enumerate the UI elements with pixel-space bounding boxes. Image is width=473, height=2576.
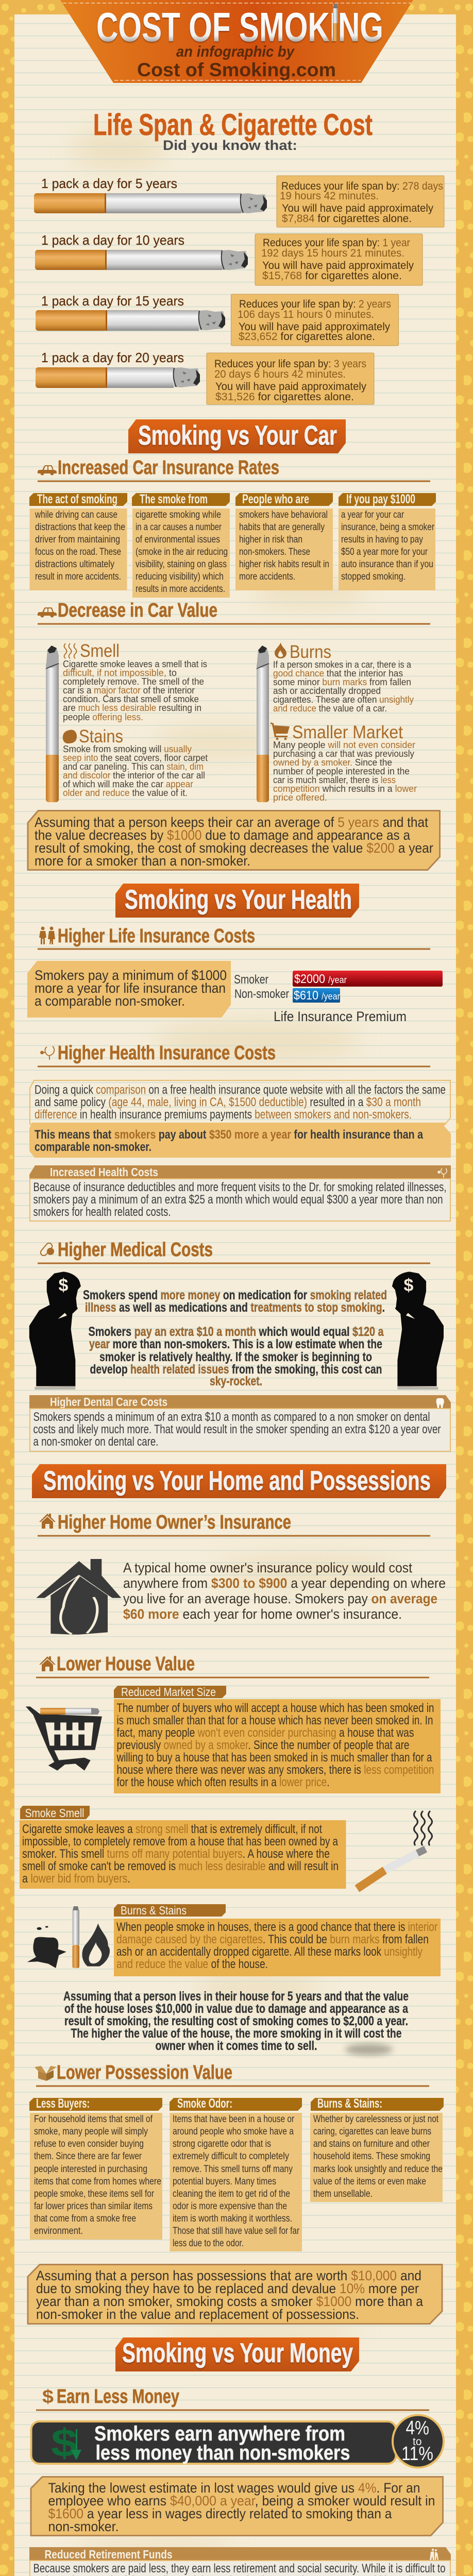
callout: possessions: year than a non smoker, smoking costs a smoker $1000 more than a [36, 2294, 424, 2309]
callout: car value: Assuming that a person keeps their car an average of 5 years and that [35, 815, 428, 830]
panel: less buyers: people smoke, these items sell for [34, 2189, 155, 2199]
bar chart: life insurance premium [234, 971, 443, 1024]
text block: house value: owner when it comes time to sell. [156, 2039, 317, 2053]
panel: smoke smell: a lower bid from buyers. [22, 1872, 130, 1886]
panel: burns: cigarettes. These are often unsightly [273, 694, 414, 705]
panel: dental costs: Higher Dental Care Costs [50, 1395, 167, 1409]
site name: Cost of Smoking.com [137, 59, 336, 80]
panel: burns: and reduce the value of a car. [273, 703, 387, 714]
panel: car insurance column 4: a year for your car [341, 510, 404, 520]
icon: smell wiggles [64, 643, 76, 658]
panel: smaller market: Smaller Market [292, 722, 403, 742]
icon: green dollar with arrow: $ [51, 2421, 78, 2465]
heading: decrease in car value [38, 600, 430, 624]
panel: smaller market: price offered. [273, 792, 327, 803]
callout: life insurance: more a year for life insurance than [35, 980, 226, 996]
heading: medical costs: Higher Medical Costs [58, 1239, 213, 1261]
panel: smoke smell: Cigarette smoke leaves a strong smell that is extremely difficult, if not [22, 1822, 322, 1836]
panel: burns: some minor burn marks from fallen [273, 677, 411, 687]
panel: car insurance column 3: more accidents. [239, 571, 295, 582]
icon: cigarette 20 years [36, 367, 200, 388]
callout: lost wages: non-smoker. [48, 2519, 119, 2534]
panel: car insurance column 4: stopped smoking. [341, 571, 406, 582]
panel: car insurance column 2: results in more accidents. [136, 584, 225, 595]
panel: less buyers: Less Buyers: [36, 2096, 90, 2111]
smudge [345, 2044, 393, 2055]
panel: smell: difficult, if not impossible, to [63, 668, 177, 678]
callout: car value: result of smoking, the cost of smoking decreases the value $200 a year [35, 840, 433, 856]
panel: stains: Smoke from smoking will usually [63, 744, 192, 754]
heading: increased car insurance [38, 457, 430, 482]
panel: reduced market size: Reduced Market Size [121, 1685, 216, 1699]
callout: 5 years: Reduces your life span by: 278 days [281, 180, 443, 192]
subheading: Did you know that: [163, 138, 297, 153]
panel: dental costs: a non-smoker on dental care. [33, 1435, 159, 1449]
panel: car insurance column 2: of environmental issues [136, 534, 220, 545]
icon: box [35, 2066, 57, 2081]
panel: reduced market size: house where there was never was any smokers, there is less competition [116, 1763, 434, 1777]
panel: smoke odor: remove. This smell turns off many [173, 2164, 293, 2175]
icon: silhouette left: $ [59, 1276, 69, 1295]
panel: smoke smell: smell of smoke can't be removed is much less desirable and will result in [22, 1859, 339, 1873]
section banner: car: Smoking vs Your Car [138, 420, 337, 451]
callout: health insurance summary: This means that smokers pay about $350 more a year for health insurance than a [35, 1128, 424, 1142]
text block: medical costs [83, 1288, 387, 1388]
panel: smoke odor: strong cigarette odor that is [173, 2139, 271, 2149]
callout: smokers earn less: less money than non-smokers [96, 2442, 350, 2464]
row: 10 years: 1 pack a day for 10 years [41, 232, 184, 248]
panel: stains: seep into the seat covers, floor carpet [63, 753, 208, 763]
panel: smoke odor: cleaning the item to get rid of the [173, 2189, 290, 2199]
heading: home owner's insurance [38, 1512, 430, 1536]
panel: car insurance column 4: auto insurance than if you [341, 559, 433, 570]
callout: 15 years: $23,652 for cigarettes alone. [239, 331, 375, 343]
panel: burns and stains possessions: value of the items or even make [313, 2176, 426, 2187]
panel: reduced market size [114, 1685, 441, 1793]
callout: 5 years: $7,884 for cigarettes alone. [282, 213, 412, 225]
text block: home insurance [123, 1560, 446, 1622]
heading: health insurance [38, 1042, 430, 1067]
callout: 5 years: You will have paid approximately [282, 202, 433, 214]
text block: medical costs: Smokers spend more money on medication for smoking related [83, 1288, 387, 1302]
panel: burns [273, 642, 414, 714]
callout: health insurance summary: comparable non-smoker. [35, 1140, 151, 1154]
text block: medical costs: develop health related issues from the smoking, this cost can [90, 1362, 382, 1377]
icon: cigarette 10 years [35, 250, 248, 270]
icon: cigarette as letter I [333, 4, 338, 41]
callout: life insurance: Smokers pay a minimum of $1000 [35, 968, 227, 983]
icon: tooth [436, 1398, 444, 1408]
callout: smokers earn less: Smokers earn anywhere from [94, 2422, 345, 2445]
panel: reduced market size: previously owned by a smoker. Since the number of people that are [116, 1738, 409, 1752]
callout: lost wages [31, 2477, 443, 2536]
panel: car insurance column 3: smokers have behavioral [239, 510, 328, 520]
callout: 20 years: $31,526 for cigarettes alone. [215, 391, 354, 403]
panel: car insurance column 1: while driving can cause [35, 510, 117, 520]
panel: smoke odor [170, 2096, 302, 2251]
icon: elderly couple [430, 2549, 438, 2560]
bar: smoker [293, 971, 443, 987]
text block: medical costs: smoker is relatively healthy. If the smoker is beginning to [99, 1350, 372, 1364]
text block: medical costs: sky-rocket. [210, 1374, 262, 1388]
panel: less buyers: refuse to even consider buying [34, 2139, 144, 2149]
panel: less buyers: them. Since there are far fewer [34, 2151, 142, 2162]
callout: 10 years: Reduces your life span by: 1 year [263, 237, 410, 249]
panel: car insurance column 2: cigarette smoking while [136, 510, 221, 520]
icon: vertical cigarette right [257, 646, 269, 802]
callout: lost wages: Taking the lowest estimate in lost wages would give us 4%. For an [48, 2480, 420, 2496]
panel: car insurance column 2: in a car causes a number [136, 522, 222, 533]
icon: flame [275, 642, 286, 658]
panel: car insurance column 1: focus on the road. These [35, 547, 121, 557]
top title banner [60, 0, 413, 83]
callout: 15 years: 106 days 11 hours 0 minutes. [238, 309, 374, 320]
callout: 20 years: 20 days 6 hours 42 minutes. [214, 368, 346, 380]
section banner: health [115, 884, 359, 918]
callout: 10 years: $15,768 for cigarettes alone. [262, 270, 402, 282]
panel: car insurance column 3: higher risk habits result in [239, 559, 329, 570]
text block: home insurance: A typical home owner's insurance policy would cost [123, 1560, 412, 1575]
icon: stain blob [63, 730, 77, 743]
panel: smaller market: owned by a smoker. Since the [273, 757, 392, 768]
callout: lost wages: employee who earns $40,000 a year, being a smoker would result in [48, 2493, 435, 2509]
panel: car insurance column 2: visibility, staining on glass [136, 559, 227, 570]
callout: 15 years: Reduces your life span by: 2 years [239, 298, 391, 310]
panel: burns and stains: Burns & Stains [121, 1904, 187, 1917]
panel: stains: and discolor the interior of the car all [63, 770, 205, 781]
row: 10 years [35, 232, 423, 285]
callout: 20 years: Reduces your life span by: 3 years [214, 358, 366, 370]
callout: car value: more for a smoker than a non-smoker. [35, 853, 250, 869]
panel: car insurance column 3 [235, 492, 333, 590]
heading: increased car insurance: Increased Car Insurance Rates [58, 457, 279, 479]
icon: silhouette right: $ [404, 1276, 414, 1295]
panel: car insurance column 1 [29, 492, 127, 590]
section banner: car [128, 419, 346, 453]
panel: smoke odor: Items that have been in a house or [173, 2114, 295, 2125]
panel: smaller market: competition which results in a lower [273, 784, 417, 794]
panel: burns and stains possessions [310, 2096, 444, 2202]
panel: dental costs [29, 1395, 451, 1451]
panel: smoke smell: smoker. This smell turns off many potential buyers. A house where the [22, 1847, 330, 1861]
panel: car insurance column 3: non-smokers. These [239, 547, 310, 557]
callout: possessions [28, 2265, 442, 2324]
heading: health insurance: Higher Health Insurance Costs [58, 1042, 276, 1064]
panel: smoke odor: item is worth making it worthless. [173, 2213, 292, 2224]
section banner: money: Smoking vs Your Money [122, 2338, 353, 2368]
panel: burns and stains possessions: Burns & Stains: [317, 2096, 382, 2111]
callout: 10 years: You will have paid approximately [262, 260, 414, 272]
badge: percent range: 11% [401, 2443, 433, 2465]
heading: lower house value [36, 1653, 429, 1679]
icon: silhouette left [29, 1272, 81, 1389]
panel: car insurance column 1: driver from maintaining [35, 534, 120, 545]
panel: increased health costs: smokers for health related costs. [33, 1205, 171, 1219]
heading: life insurance: Higher Life Insurance Costs [58, 925, 255, 947]
callout: possessions: due to smoking they have to be replaced and devalue 10% more per [36, 2281, 419, 2296]
icon: silhouette right [392, 1272, 444, 1389]
text block: medical costs: year more than non-smokers. This is a low estimate when the [89, 1337, 382, 1351]
panel: car insurance column 1: distractions that keep the [35, 522, 125, 533]
text block: home insurance: anywhere from $300 to $900 a year depending on where [123, 1575, 446, 1591]
icon: small stethoscope [438, 1168, 447, 1178]
bar: non-smoker: $610 /year [294, 989, 340, 1003]
panel: car insurance column 2 [132, 492, 230, 598]
panel: less buyers: environment. [34, 2226, 83, 2236]
callout: 10 years: 192 days 15 hours 21 minutes. [261, 247, 404, 259]
panel: burns and stains: ash or an accidentally dropped cigarette. All these marks look unsightly [116, 1945, 423, 1959]
heading: medical costs [38, 1239, 430, 1264]
panel: less buyers: items that come from homes where [34, 2176, 161, 2187]
icon: small cart [271, 722, 290, 740]
badge: percent range: to [413, 2436, 421, 2448]
panel: health insurance comparison: and same policy (age 44, male, living in CA, $1500 deductible) resulted in a $30 a month [35, 1095, 421, 1109]
panel: smaller market: purchasing a car that was previously [273, 749, 414, 759]
panel: smell: people offering less. [63, 712, 143, 722]
panel: smoke odor: Smoke Odor: [177, 2096, 232, 2111]
panel: car insurance column 4: $50 a year more for your [341, 547, 428, 557]
callout: life insurance: a comparable non-smoker. [35, 993, 185, 1009]
icon: stain, cigarette and flame [27, 1906, 110, 1968]
panel: less buyers: For household items that smell of [34, 2114, 153, 2125]
panel: smaller market: Many people will not even consider [273, 740, 415, 750]
panel: stains: and car paneling. This can stain, dim [63, 761, 204, 772]
panel: smell: condition. Cars that smell of smoke [63, 694, 199, 704]
panel: burns and stains possessions: marks look unsightly and reduce the [313, 2164, 443, 2175]
panel: burns and stains: damage caused by the cigarettes. This could be burn marks from fallen [116, 1933, 429, 1946]
row: 5 years: 1 pack a day for 5 years [41, 176, 177, 191]
badge: percent range [401, 2417, 433, 2465]
panel: burns: good chance that the interior has [273, 668, 403, 679]
icon: people [39, 926, 55, 944]
bar chart: life insurance premium: Non-smoker [234, 987, 289, 1001]
panel: increased health costs: Increased Health Costs [50, 1165, 158, 1179]
panel: smoke odor: Those that still have value sell for far [173, 2226, 300, 2236]
panel: smell: Cigarette smoke leaves a smell that is [63, 659, 207, 669]
panel: reduced market size: fact, many people won't even consider purchasing a house that was [116, 1726, 414, 1740]
heading: earn less money [36, 2386, 429, 2411]
icon: cart with cigarette [26, 1706, 102, 1771]
text block: medical costs: Smokers pay an extra $10 a month which would equal $120 a [89, 1325, 384, 1339]
panel: smell: completely remove. The smell of the [63, 676, 204, 687]
panel: car insurance column 4: If you pay $1000 [346, 492, 415, 506]
panel: reduced market size: for the house which often results in a lower price. [116, 1775, 330, 1789]
panel: car insurance column 1: distractions ultimately [35, 559, 114, 570]
panel: stains: of which will make the car appear [63, 779, 193, 789]
panel: smoke smell [20, 1806, 346, 1889]
icon: cigarette 5 years [34, 193, 267, 213]
panel: less buyers: far lower prices than similar items [34, 2201, 153, 2212]
heading: lower house value: Lower House Value [57, 1653, 195, 1675]
icon: cigarette 15 years [36, 310, 225, 331]
panel: smoke smell: impossible, to completely remove from a house that has been owned by a [22, 1835, 339, 1849]
panel: burns and stains possessions: and stains on furniture and other [313, 2139, 430, 2149]
heading: life span: Life Span & Cigarette Cost [93, 108, 373, 142]
icon: stethoscope [41, 1046, 54, 1060]
panel: smoke smell: Smoke Smell [25, 1806, 85, 1820]
panel: smaller market [271, 722, 417, 803]
panel: burns and stains possessions: caring, cigarettes can leave burns [313, 2126, 431, 2137]
panel: stains: Stains [79, 726, 123, 747]
panel: burns and stains possessions: household items. These smoking [313, 2151, 430, 2162]
panel: car insurance column 1: result in more accidents. [35, 571, 121, 582]
subtitle: an infographic by [176, 43, 295, 60]
panel: car insurance column 3: People who are [242, 492, 309, 506]
panel: health insurance comparison: difference in health insurance premiums payments between smokers and non-smokers. [35, 1108, 412, 1122]
panel: increased health costs [29, 1165, 451, 1221]
section banner: health: Smoking vs Your Health [125, 885, 352, 915]
panel: less buyers [29, 2096, 162, 2240]
callout: car value: the value decreases by $1000 due to damage and appearance as a [35, 827, 411, 843]
panel: smaller market: number of people interested in the [273, 766, 410, 776]
callout: car value [28, 811, 440, 870]
panel: car insurance column 2: reducing visibility) which [136, 571, 224, 582]
panel: car insurance column 4 [339, 492, 436, 590]
callout: 5 years: 19 hours 42 minutes. [280, 190, 379, 202]
callout: 10 years [255, 234, 423, 285]
heading: decrease in car value: Decrease in Car Value [58, 600, 217, 621]
panel: smell: Smell [80, 641, 120, 661]
text block: home insurance: you live for an average house. Smokers pay on average [123, 1591, 437, 1606]
badge: percent range: 4% [406, 2417, 429, 2439]
callout: 15 years: You will have paid approximately [239, 321, 390, 333]
callout: possessions: Assuming that a person has possessions that are worth $10,000 and [36, 2268, 421, 2283]
panel: car insurance column 4: insurance, being a smoker [341, 522, 435, 533]
panel: burns and stains: and reduce the value of the house. [116, 1957, 268, 1971]
panel: burns and stains [114, 1904, 441, 1976]
callout: smokers earn less [31, 2415, 444, 2468]
panel: smell [63, 641, 207, 722]
panel: smoke odor: around people who smoke have a [173, 2126, 294, 2137]
panel: smoke odor: potential buyers. Many times [173, 2176, 276, 2187]
callout: possessions: non-smoker in the value and replacement of possessions. [36, 2307, 359, 2322]
callout: life insurance [27, 961, 231, 1018]
panel: stains: older and reduce the value of it. [63, 788, 188, 798]
panel: burns and stains possessions: Whether by carelessness or just not [313, 2114, 439, 2125]
panel: burns: If a person smokes in a car, there is a [273, 659, 412, 670]
icon: house with flame [36, 1559, 121, 1635]
panel: car insurance column 2: The smoke from [140, 492, 208, 506]
row: 15 years: 1 pack a day for 15 years [41, 293, 184, 309]
panel: smaller market: car is much smaller, there is less [273, 775, 396, 785]
callout: lost wages: $1600 a year less in wages directly related to smoking than a [48, 2506, 392, 2521]
panel: car insurance column 4: results in having to pay [341, 534, 423, 545]
callout: health insurance summary [29, 1123, 451, 1158]
row: 20 years [36, 350, 374, 404]
callout: 5 years [277, 176, 444, 227]
row: 15 years [36, 293, 399, 346]
heading: possession value [35, 2062, 429, 2087]
panel: burns: Burns [290, 642, 331, 662]
text block: house value [63, 1989, 409, 2053]
panel: smoke odor: odor is more expensive than the [173, 2201, 287, 2212]
callout: 20 years [207, 353, 374, 404]
icon: smoke wiggles and cigarette [357, 1811, 432, 1889]
heading: life insurance [38, 925, 430, 950]
heading: home owner's insurance: Higher Home Owner’s Insurance [58, 1512, 291, 1533]
callout: 15 years [231, 294, 399, 346]
section banner: money [115, 2337, 359, 2371]
panel: smell: are much less desirable resulting in [63, 703, 201, 713]
panel: car insurance column 3: habits that are generally [239, 522, 325, 533]
panel: retirement funds: Reduced Retirement Funds [44, 2548, 172, 2561]
icon: pills [39, 1242, 54, 1257]
row: 5 years [34, 176, 444, 227]
panel: smoke odor: extremely difficult to completely [173, 2151, 289, 2162]
callout: 20 years: You will have paid approximately [215, 381, 366, 393]
panel: smoke odor: less due to the odor. [173, 2238, 244, 2249]
panel: stains [63, 726, 208, 798]
panel: less buyers: smoke, many people will simply [34, 2126, 148, 2137]
panel: less buyers: that come from a smoke free [34, 2213, 136, 2224]
panel: car insurance column 2: (smoke in the air reducing [136, 547, 228, 557]
panel: car insurance column 1: The act of smoking [37, 492, 117, 506]
text block: home insurance: $60 more each year for home owner's insurance. [123, 1606, 402, 1622]
heading: possession value: Lower Possession Value [57, 2062, 232, 2083]
heading: earn less money: Earn Less Money [57, 2386, 179, 2408]
panel: burns: ash or accidentally dropped [273, 686, 381, 696]
icon: vertical cigarette left [46, 646, 59, 802]
row: 20 years: 1 pack a day for 20 years [41, 350, 184, 365]
panel: smell: car is a major factor of the interior [63, 685, 195, 696]
panel: burns and stains possessions: them unsellable. [313, 2189, 373, 2199]
panel: health insurance comparison [29, 1080, 451, 1158]
icon: dollar down: $ [42, 2386, 54, 2407]
text block: medical costs: illness as well as medications and treatments to stop smoking. [85, 1300, 385, 1315]
bar: smoker: $2000 /year [294, 972, 347, 986]
bar chart: life insurance premium: Smoker [234, 973, 268, 987]
bar chart: life insurance premium: Life Insurance Premium [274, 1009, 407, 1024]
panel: car insurance column 3: higher in risk than [239, 534, 302, 545]
panel: less buyers: people interested in purchasing [34, 2164, 147, 2175]
panel: retirement funds [29, 2547, 451, 2576]
